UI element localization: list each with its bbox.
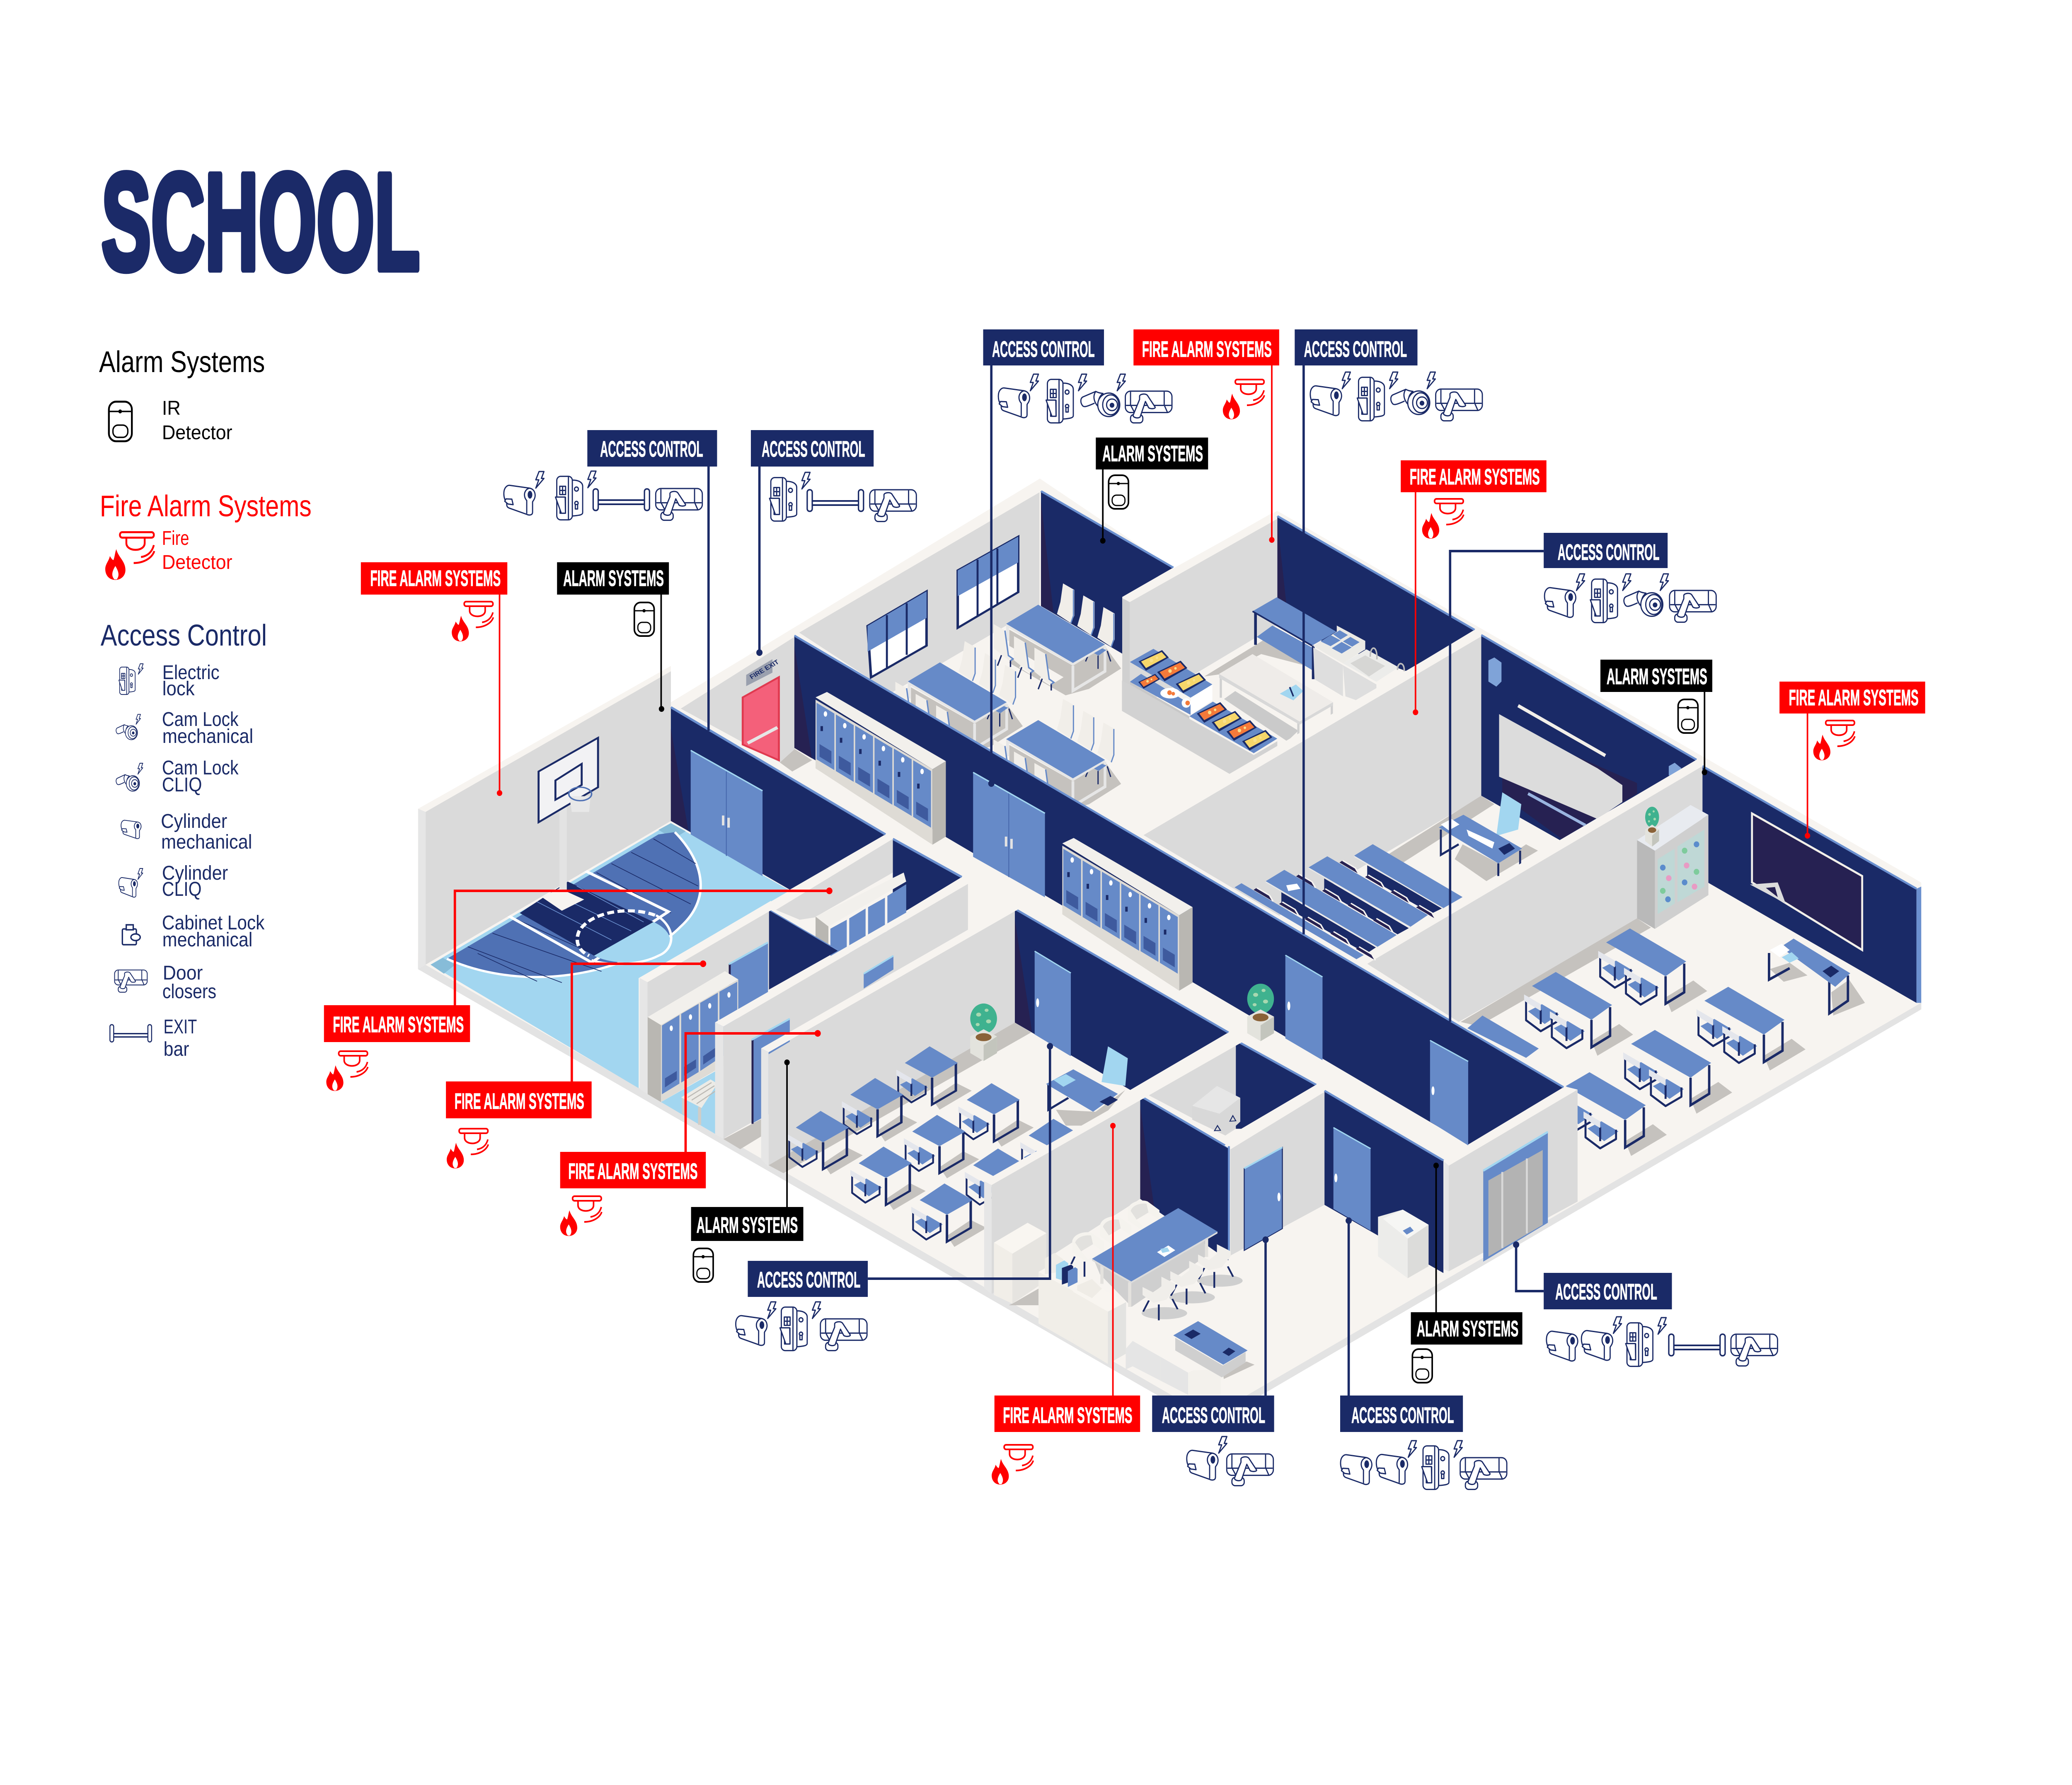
callout: access control office <box>1152 1236 1274 1486</box>
legend: access control items: EXIT <box>164 1016 197 1038</box>
callout: fire alarm gym <box>361 562 507 796</box>
callout: fire alarm storage: FIRE ALARM SYSTEMS <box>333 1013 464 1037</box>
copier <box>1378 1209 1428 1278</box>
legend: fire detector <box>105 527 232 580</box>
long corridor wall <box>794 636 1564 1144</box>
legend: access control items: mechanical <box>161 831 252 853</box>
callout: alarm classroom <box>691 1059 804 1282</box>
callout: access control admin: ACCESS CONTROL <box>1351 1403 1454 1428</box>
prep table <box>1219 654 1333 741</box>
basketball court <box>447 832 701 983</box>
isometric school building <box>418 479 1921 1425</box>
callout: alarm gym <box>557 562 669 712</box>
admin navy wall <box>1324 1091 1443 1273</box>
small storage room <box>1236 1040 1316 1129</box>
legend: access control items: Cylinder <box>161 810 227 832</box>
callout: access control classroom <box>736 1043 1053 1351</box>
stove <box>1313 626 1365 697</box>
student desks lower <box>896 1046 972 1110</box>
classroom front wall <box>992 1098 1140 1294</box>
legend: access control items: Cylinder <box>162 862 228 884</box>
legend: access control items: Electric <box>162 661 220 683</box>
office navy wall <box>1140 1096 1228 1260</box>
lower rooms <box>761 903 1443 1294</box>
windows <box>868 537 1018 677</box>
legend: access control items: Cabinet Lock <box>162 912 265 934</box>
lockers small B <box>648 971 738 1102</box>
legend: access control items <box>110 661 265 1060</box>
callout: fire alarm science: FIRE ALARM SYSTEMS <box>1789 686 1919 710</box>
bench <box>681 1079 717 1125</box>
teacher desk science <box>1769 938 1865 1016</box>
high door <box>864 956 893 989</box>
callout: alarm admin: ALARM SYSTEMS <box>1417 1317 1518 1341</box>
legend: fire detector: Detector <box>162 551 232 573</box>
legend: access control items: Door <box>163 962 203 984</box>
classroom navy wall <box>1015 909 1228 1090</box>
legend: access control items: mechanical <box>162 929 252 951</box>
kitchen shelf <box>1253 597 1336 679</box>
callout: access control admin <box>1340 1217 1507 1490</box>
callout: access control gym: ACCESS CONTROL <box>600 437 703 462</box>
callout: access control science: ACCESS CONTROL <box>1558 540 1659 565</box>
callout: fire alarm gym: FIRE ALARM SYSTEMS <box>370 566 501 591</box>
callout: fire alarm kitchen: FIRE ALARM SYSTEMS <box>1142 337 1272 362</box>
fire exit door <box>743 659 780 760</box>
science cabinet <box>1637 805 1709 929</box>
right small wall <box>1230 1092 1324 1255</box>
legend: IR detector: Detector <box>162 421 232 443</box>
lockers small A <box>816 873 906 960</box>
double door corridor <box>973 772 1045 897</box>
tall cabinet <box>994 1223 1046 1305</box>
teacher desk lower <box>1046 1046 1128 1126</box>
callout: fire alarm kitchen <box>1133 329 1279 543</box>
callout: access control cafeteria <box>983 329 1172 787</box>
legend: access control items: CLIQ <box>162 774 202 796</box>
student desks science <box>1598 929 1707 1012</box>
corridor doors <box>1285 955 1468 1145</box>
callout: fire alarm corridor <box>560 1030 821 1236</box>
food counter <box>1122 649 1277 774</box>
callout: fire alarm storage <box>324 888 833 1091</box>
office furniture <box>994 1200 1254 1395</box>
small desk and unit <box>1126 1321 1254 1395</box>
gym double door <box>691 750 762 876</box>
panel: legend <box>99 345 312 1060</box>
kitchen interior <box>1122 597 1404 774</box>
teacher desk <box>1439 792 1538 881</box>
locker room door <box>729 942 768 1019</box>
legend: access control items: mechanical <box>162 725 253 747</box>
callout: alarm cafeteria <box>1096 438 1208 544</box>
legend: IR detector: IR <box>162 397 181 419</box>
meeting table chairs back <box>1128 1200 1159 1230</box>
callout: access control kitchen <box>1295 329 1482 934</box>
classroom back wall <box>769 909 1015 1165</box>
callout: alarm lecture <box>1600 660 1712 775</box>
legend: access control items: closers <box>162 980 216 1002</box>
callout: fire alarm office <box>992 1123 1140 1485</box>
chalkboard <box>1750 813 1862 950</box>
locker bank 1 <box>816 692 946 845</box>
callout: alarm cafeteria: ALARM SYSTEMS <box>1102 442 1203 466</box>
callout: access control office: ACCESS CONTROL <box>1162 1403 1265 1428</box>
callout: alarm lecture: ALARM SYSTEMS <box>1607 665 1707 689</box>
callout: access control cafeteria: ACCESS CONTROL <box>992 337 1095 362</box>
callout: access control entrance <box>1513 1241 1777 1367</box>
callout: access control science <box>1450 533 1716 1022</box>
dividing grey wall <box>1134 630 1482 916</box>
navy gym wall <box>671 707 886 890</box>
lecture benches <box>1234 844 1462 960</box>
callout: fire alarm corridor: FIRE ALARM SYSTEMS <box>568 1159 698 1184</box>
callout: fire alarm lockers <box>446 960 706 1168</box>
entrance wall <box>1444 1086 1578 1271</box>
floor slab <box>418 953 1921 1425</box>
science room <box>1702 766 1917 1003</box>
low cabinets and books <box>1038 1253 1126 1364</box>
gym back wall <box>418 666 671 812</box>
callout: access control entrance: ACCESS CONTROL <box>1555 1280 1657 1304</box>
callout: alarm admin <box>1411 1163 1523 1383</box>
callout: access control exit: ACCESS CONTROL <box>762 437 865 462</box>
legend: access control items: lock <box>162 677 195 699</box>
legend: fire detector: Fire <box>162 527 189 549</box>
heading: access control: Access Control <box>101 619 267 652</box>
basketball hoop <box>539 738 598 911</box>
callout: fire alarm science <box>1779 682 1925 839</box>
heading: alarm systems: Alarm Systems <box>99 345 265 378</box>
title: SCHOOL <box>102 145 420 299</box>
callout: fire alarm lecture: FIRE ALARM SYSTEMS <box>1410 465 1540 489</box>
callout: fire alarm lecture <box>1401 460 1547 715</box>
corridor back wall and exit <box>681 637 795 762</box>
long partition wall <box>724 884 968 1139</box>
gym room <box>418 637 886 1088</box>
legend: IR detector <box>109 397 232 443</box>
meeting table <box>1092 1208 1218 1307</box>
locker room partitions <box>767 835 962 960</box>
callout: alarm gym: ALARM SYSTEMS <box>563 566 664 591</box>
callout: access control exit <box>751 430 916 656</box>
heading: fire alarm systems: Fire Alarm Systems <box>100 489 312 522</box>
callout: access control gym <box>504 430 717 731</box>
entrance glass door <box>1483 1132 1548 1262</box>
sink <box>1343 648 1404 700</box>
cafeteria and kitchen walls <box>799 491 1474 715</box>
legend: access control items: Cam Lock <box>162 708 239 730</box>
callout: access control classroom: ACCESS CONTROL <box>757 1268 860 1292</box>
callout: alarm classroom: ALARM SYSTEMS <box>697 1213 798 1238</box>
cafeteria tables <box>896 583 1121 811</box>
locker bank 2 <box>1062 838 1193 991</box>
fire exit door: FIRE EXIT <box>748 659 780 681</box>
partition door <box>752 1019 790 1124</box>
callout: access control kitchen: ACCESS CONTROL <box>1304 337 1407 362</box>
legend: access control items: bar <box>164 1038 189 1060</box>
callouts <box>324 329 1925 1490</box>
callout: fire alarm lockers: FIRE ALARM SYSTEMS <box>455 1089 584 1114</box>
legend: access control items: CLIQ <box>162 878 202 900</box>
lecture room <box>1360 635 1921 1156</box>
legend: access control items: Cam Lock <box>162 757 239 779</box>
callout: fire alarm office: FIRE ALARM SYSTEMS <box>1003 1403 1132 1428</box>
